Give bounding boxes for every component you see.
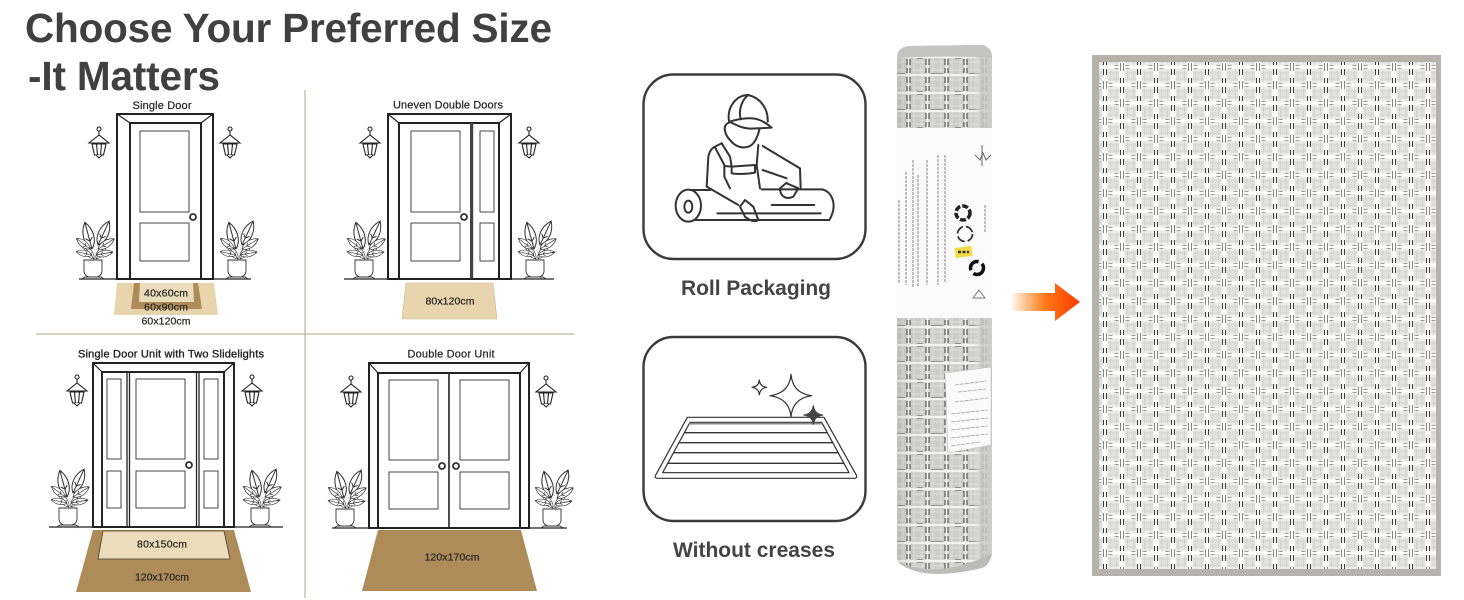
potted plants	[326, 468, 575, 528]
panel: uneven double doors	[344, 100, 558, 319]
mats	[76, 530, 251, 592]
mat	[402, 283, 497, 319]
size label: 120x170cm	[424, 552, 480, 564]
recycling symbol	[956, 206, 970, 220]
swirl symbol	[958, 226, 972, 242]
panel title: Single Door	[132, 100, 192, 112]
fine print lines	[899, 155, 985, 287]
size labels: 60x120cm	[142, 316, 191, 328]
caption: Without creases	[673, 539, 835, 562]
feature: roll packaging	[644, 74, 866, 300]
wall lamps	[360, 127, 539, 158]
roll body	[895, 44, 995, 580]
door illustration	[93, 363, 234, 527]
caption: Roll Packaging	[681, 277, 831, 300]
black circle symbol	[970, 262, 984, 274]
potted plants	[74, 219, 260, 279]
size labels: 40x60cm	[144, 288, 188, 300]
ground line	[79, 278, 251, 280]
size labels: 80x150cm	[137, 538, 187, 550]
main heading	[25, 5, 552, 99]
potted plants	[49, 467, 283, 527]
ground line	[332, 527, 567, 529]
size labels: 120x170cm	[135, 572, 189, 584]
panel title: Double Door Unit	[408, 348, 494, 360]
rolled mat with paper band	[895, 44, 995, 580]
size labels	[135, 538, 189, 584]
main heading: Choose Your Preferred Size	[25, 5, 552, 51]
triangle symbol	[973, 290, 985, 298]
main heading: -It Matters	[28, 53, 220, 99]
mat	[362, 530, 537, 591]
panel: double door unit	[326, 348, 575, 591]
size labels	[142, 288, 191, 328]
panel title: Single Door Unit with Two Slidelights	[78, 348, 264, 360]
paper band	[896, 128, 992, 318]
icon box with worker rolling a mat	[644, 74, 866, 259]
mats	[114, 283, 218, 315]
yellow warning tag	[954, 246, 973, 258]
small product sticker	[945, 367, 991, 453]
door illustration	[369, 363, 529, 528]
ground line	[49, 526, 283, 528]
wall lamps	[341, 376, 556, 407]
size label: 80x120cm	[426, 296, 475, 308]
quadrant dividers	[36, 90, 574, 598]
arrow	[1010, 283, 1080, 321]
panel title: Uneven Double Doors	[393, 100, 504, 112]
potted plants	[345, 219, 558, 279]
icon box with flat mat and sparkles	[644, 337, 866, 521]
panel: single door with sidelights	[49, 348, 283, 592]
door illustration	[388, 114, 511, 279]
feature: without creases	[644, 337, 866, 562]
size labels: 60x90cm	[144, 302, 188, 314]
ground line	[344, 278, 554, 280]
wall lamps	[67, 375, 262, 406]
panel: single door	[74, 100, 260, 328]
crown logo	[975, 145, 991, 166]
wall lamps	[89, 127, 240, 158]
unrolled mat	[1092, 55, 1441, 576]
door illustration	[117, 114, 213, 279]
